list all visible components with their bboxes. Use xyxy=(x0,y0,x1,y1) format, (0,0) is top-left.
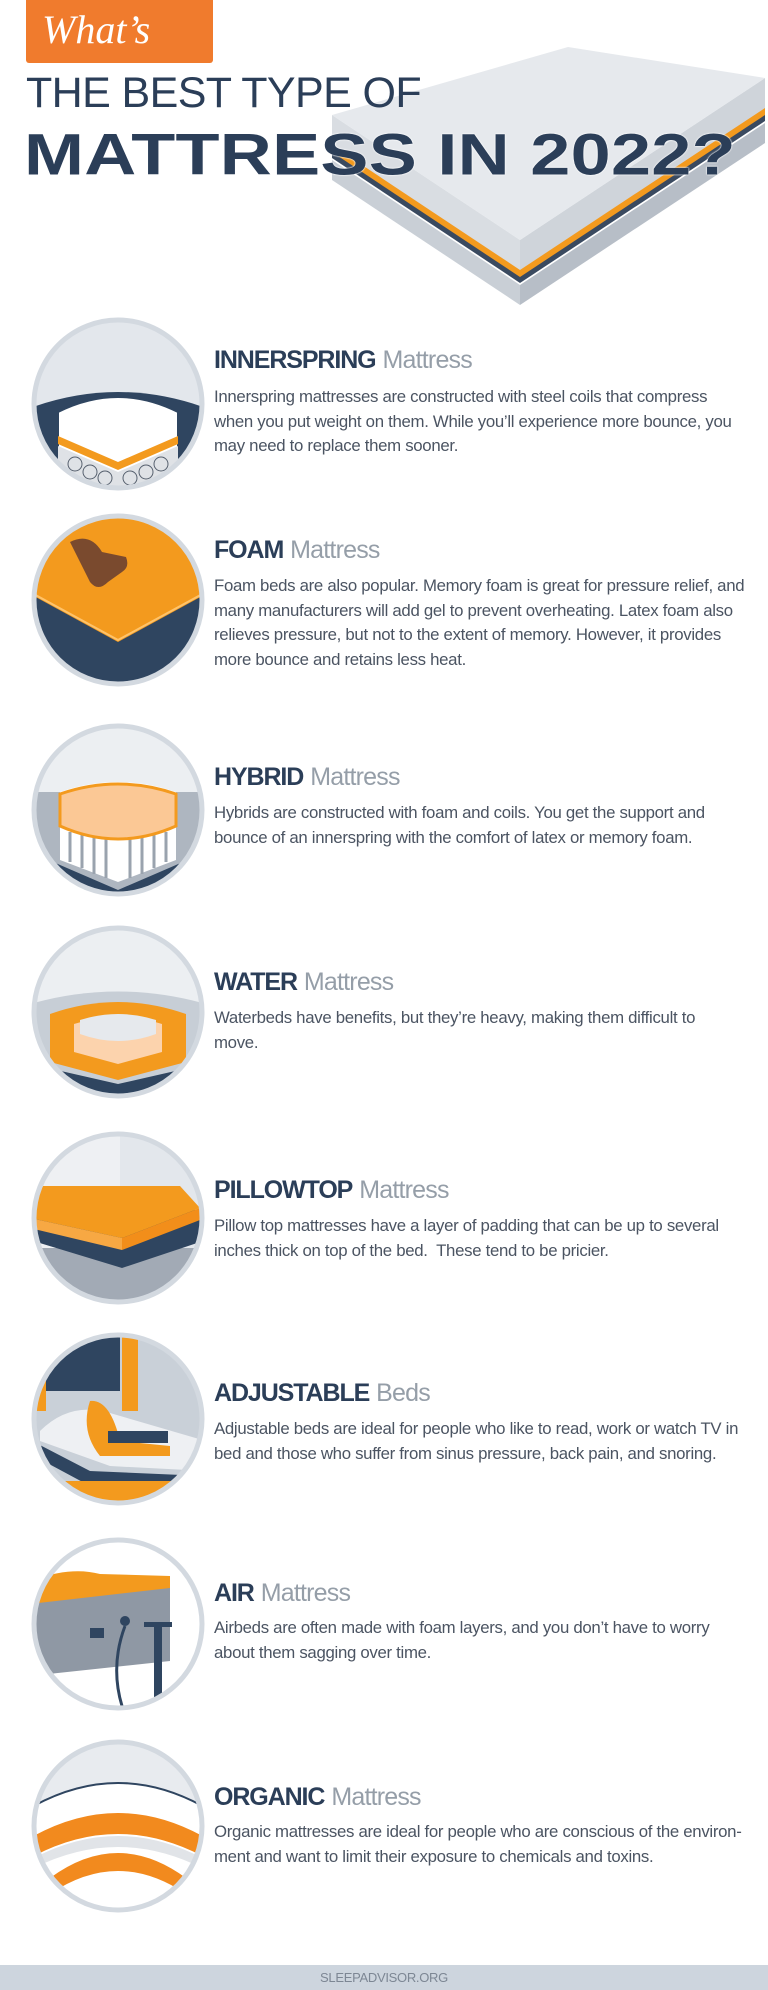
icon: water xyxy=(32,926,204,1098)
icon: organic xyxy=(32,1740,204,1912)
text: hybrid: bounce of an innerspring with the comfort of latex or memory foam. xyxy=(214,828,692,846)
text: air xyxy=(214,1618,710,1662)
text: water xyxy=(214,1008,695,1052)
heading: innerspring: INNERSPRING Mattress xyxy=(214,346,472,374)
text: air: Airbeds are often made with foam layers, and you don’t have to worry xyxy=(214,1618,709,1637)
text: foam xyxy=(214,576,744,668)
icon: air xyxy=(32,1538,204,1710)
footer: SLEEPADVISOR.ORG xyxy=(320,1970,448,1985)
text: hybrid: Hybrids are constructed with foam and coils. You get the support and xyxy=(214,803,705,822)
text: pillowtop: Pillow top mattresses have a layer of padding that can be up to several xyxy=(214,1216,719,1235)
text: innerspring: may need to replace them sooner. xyxy=(214,436,458,455)
icon: adjustable xyxy=(32,1332,204,1506)
text: hybrid xyxy=(214,803,705,846)
text: adjustable: bed and those who suffer from sinus pressure, back pain, and snoring. xyxy=(214,1444,716,1462)
title line 2: MATTRESS IN 2022? xyxy=(24,123,736,188)
heading: organic: ORGANIC Mattress xyxy=(214,1783,421,1811)
text: pillowtop: inches thick on top of the bed. These tend to be pricier. xyxy=(214,1240,609,1260)
title line 1: THE BEST TYPE OF xyxy=(26,69,421,117)
text: organic: Organic mattresses are ideal for people who are conscious of the environ- xyxy=(214,1822,742,1841)
heading: pillowtop: PILLOWTOP Mattress xyxy=(214,1176,449,1204)
text: foam: relieves pressure, but not to the extent of memory. However, it provides xyxy=(214,625,721,644)
header badge: What's xyxy=(26,0,213,63)
header badge: What's: What’s xyxy=(42,7,150,52)
text: foam: many manufacturers will add gel to prevent overheating. Latex foam also xyxy=(214,600,733,620)
text: organic xyxy=(214,1822,742,1866)
text: adjustable: Adjustable beds are ideal for people who like to read, work or watch TV in xyxy=(214,1419,738,1438)
text: water: move. xyxy=(214,1032,258,1052)
heading: water: WATER Mattress xyxy=(214,968,393,996)
heading: adjustable: ADJUSTABLE Beds xyxy=(214,1379,430,1407)
footer xyxy=(0,1965,768,1990)
text: innerspring: Innerspring mattresses are constructed with steel coils that compress xyxy=(214,387,707,406)
icon: hybrid xyxy=(32,724,204,896)
text: water: Waterbeds have benefits, but they’re heavy, making them difficult to xyxy=(214,1008,695,1027)
text: pillowtop xyxy=(214,1216,719,1260)
text: air: about them sagging over time. xyxy=(214,1642,431,1662)
text: foam: Foam beds are also popular. Memory foam is great for pressure relief, and xyxy=(214,576,744,595)
text: innerspring: when you put weight on them. While you’ll experience more bounce, you xyxy=(214,412,732,430)
heading: hybrid: HYBRID Mattress xyxy=(214,763,400,791)
icon: pillowtop xyxy=(32,1132,204,1304)
text: organic: ment and want to limit their exposure to chemicals and toxins. xyxy=(214,1846,653,1866)
icon: foam xyxy=(32,514,204,686)
text: adjustable xyxy=(214,1419,738,1462)
icon: innerspring xyxy=(32,318,204,490)
text: foam: more bounce and retains less heat. xyxy=(214,650,466,668)
heading: air: AIR Mattress xyxy=(214,1579,350,1607)
hero mattress illustration xyxy=(332,47,765,305)
heading: foam: FOAM Mattress xyxy=(214,536,380,564)
text: innerspring xyxy=(214,387,732,455)
